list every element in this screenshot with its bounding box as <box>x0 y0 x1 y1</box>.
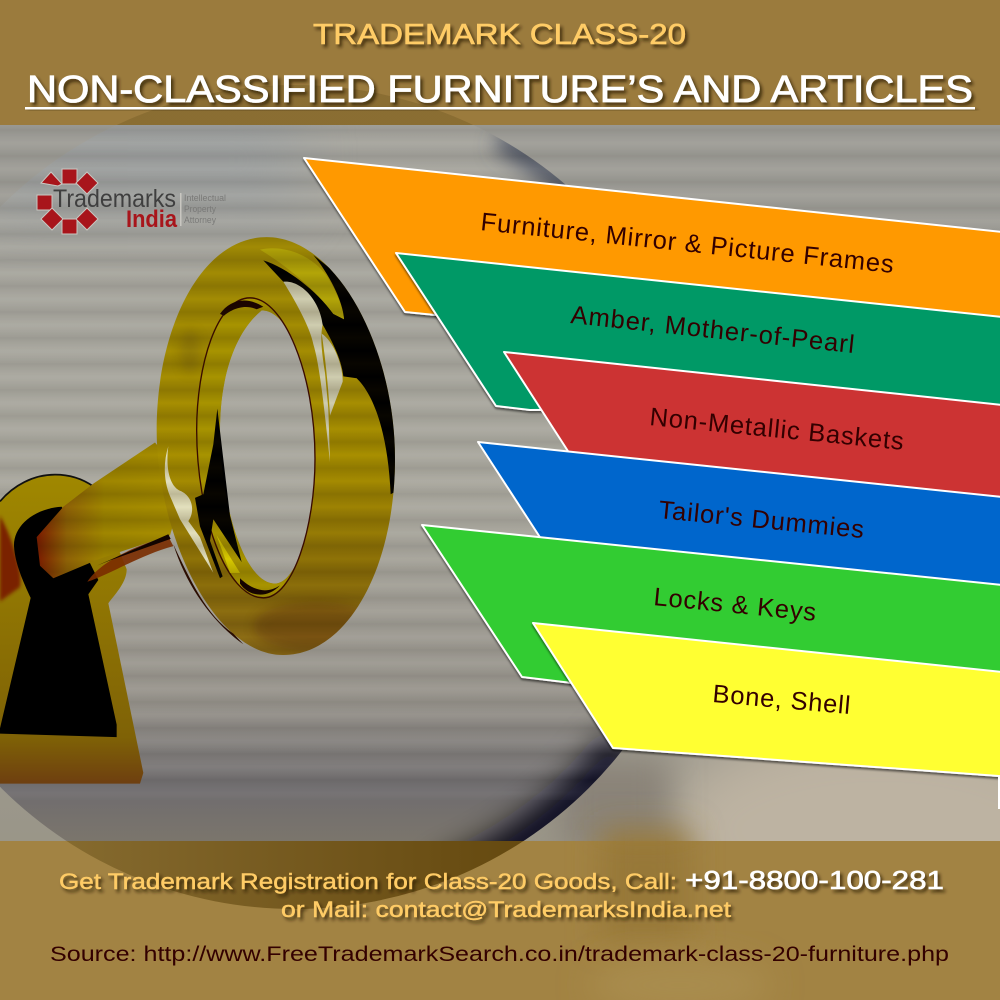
call to action: Get Trademark Registration for Class-20 Goods, Call: <box>59 869 677 894</box>
ribbon: Amber, Mother-of-Pearl: Amber, Mother-of-Pearl <box>569 301 856 359</box>
ring shading, lower right <box>180 330 380 651</box>
ribbon: Bone, Shell <box>533 623 1000 777</box>
key ring <box>157 237 417 655</box>
lens edge shadow, lower right <box>438 724 622 841</box>
black reflection, inner left of ring <box>195 409 242 578</box>
header band <box>0 0 1000 125</box>
black reflection, upper right of ring <box>264 255 395 494</box>
ribbon: Furniture, Mirror and Picture Frames: Furniture, Mirror & Picture Frames <box>479 208 895 279</box>
ribbon: Amber, Mother-of-Pearl <box>396 253 1000 410</box>
dark edge, lower left of ring <box>173 544 243 644</box>
main title: NON-CLASSIFIED FURNITURE’S AND ARTICLES <box>27 69 973 111</box>
magnifying lens circle with key scene <box>0 135 623 841</box>
gold highlight on ring <box>260 248 344 319</box>
key and keyhole illustration <box>0 237 417 784</box>
phone number: +91-8800-100-281 <box>685 865 944 895</box>
keyhole brass plate <box>0 475 143 784</box>
ribbon: Non-Metallic Baskets: Non-Metallic Baskets <box>648 403 905 456</box>
lens edge shadow, upper right <box>486 134 566 185</box>
logo tagline: Intellectual <box>184 193 226 203</box>
logo mark: ring of red squares <box>37 169 98 234</box>
bright reflections, upper right of ring <box>283 282 343 462</box>
subtitle: TRADEMARK CLASS-20 <box>313 19 686 51</box>
ribbon: Locks and Keys: Locks & Keys <box>652 583 817 627</box>
logo tagline: Attorney <box>184 215 216 225</box>
source line: Source: http://www.FreeTrademarkSearch.co.in/trademark-class-20-furniture.php <box>50 943 949 966</box>
ribbon: Tailor's Dummies: Tailor's Dummies <box>657 496 865 544</box>
logo tagline: Property <box>184 204 216 214</box>
ribbon: Non-Metallic Baskets <box>504 352 1000 498</box>
ribbon: Furniture, Mirror and Picture Frames <box>304 158 1000 318</box>
ribbon: Bone, Shell: Bone, Shell <box>711 680 851 720</box>
logo: Trademarks India <box>37 169 226 234</box>
bright reflection, near shaft <box>165 446 240 573</box>
email line: or Mail: contact@TrademarksIndia.net <box>281 897 731 922</box>
ribbon: Locks and Keys <box>422 525 1000 683</box>
ring inner bevel <box>201 310 304 597</box>
key shaft <box>37 442 187 578</box>
keyhole black opening <box>0 507 117 737</box>
footer band <box>0 830 1000 1000</box>
ribbon: Tailor's Dummies <box>478 442 1000 586</box>
logo wordmark: Trademarks <box>53 185 176 213</box>
horizontal bands across key <box>37 237 394 655</box>
logo tagline <box>184 193 226 225</box>
logo: Trademarks India: India <box>126 206 178 233</box>
